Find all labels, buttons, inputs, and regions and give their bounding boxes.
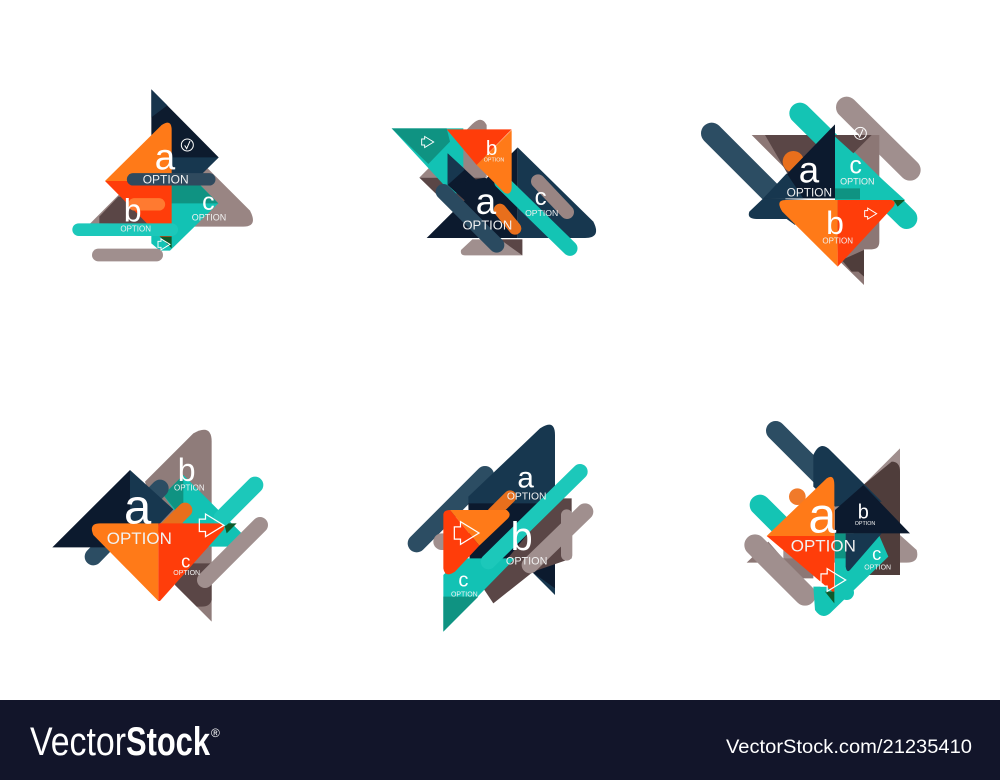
option a: OPTION: [143, 172, 189, 186]
option a: OPTION: [507, 491, 546, 502]
graphic 1: top left option diagram: [79, 89, 253, 255]
option c: OPTION: [192, 213, 226, 223]
option c: [173, 550, 200, 577]
option b: [822, 205, 853, 246]
option c: OPTION: [864, 564, 891, 571]
option a: a: [808, 488, 836, 544]
option c: OPTION: [525, 208, 558, 218]
option b: b: [826, 205, 844, 241]
option c: OPTION: [173, 570, 200, 577]
option b: [855, 501, 875, 527]
option b: b: [511, 515, 533, 559]
option a: [462, 181, 512, 232]
layered shapes 6: [747, 431, 917, 616]
option a: OPTION: [107, 529, 172, 548]
layered shapes 1: [79, 89, 253, 255]
option a: [507, 461, 546, 502]
option b: OPTION: [855, 521, 875, 527]
option c: c: [458, 570, 468, 592]
option b: b: [858, 501, 869, 523]
option c: c: [181, 550, 190, 571]
graphic 6: bottom right option diagram: [747, 431, 917, 616]
wordmark: VectorStock: [30, 720, 220, 764]
option b: OPTION: [506, 555, 547, 567]
footer bar: [0, 700, 1000, 780]
option c: c: [872, 543, 881, 564]
icon: check: [181, 139, 193, 151]
option c: [840, 151, 875, 186]
layered shapes 4: [52, 430, 260, 622]
option b: b: [124, 193, 142, 229]
wordmark: VectorStock: ®: [211, 726, 220, 740]
option c: c: [535, 184, 547, 211]
option b: OPTION: [822, 237, 853, 246]
layered shapes 5: [417, 425, 585, 632]
option c: [192, 188, 226, 223]
option b: b: [178, 452, 196, 488]
icon: arrow: [821, 569, 846, 591]
option b: OPTION: [174, 484, 205, 493]
option a: a: [799, 150, 820, 191]
option a: a: [476, 181, 497, 222]
option c: [451, 570, 478, 599]
option c: c: [202, 188, 215, 216]
option c: [864, 543, 891, 571]
option a: a: [155, 136, 176, 177]
icon: arrow: [158, 239, 170, 250]
graphic 4: bottom left option diagram: [52, 430, 260, 622]
graphic 3: top right option diagram: [712, 107, 910, 285]
option b: [506, 515, 547, 567]
wordmark: VectorStock: Stock: [126, 720, 211, 764]
option c: OPTION: [840, 176, 875, 186]
option b: [120, 193, 151, 234]
option a: a: [517, 461, 534, 494]
icon: arrow: [422, 136, 434, 148]
option c: [525, 184, 558, 218]
option a: OPTION: [791, 537, 856, 556]
option b: [484, 137, 504, 163]
layered shapes 3: [712, 107, 910, 285]
option a: OPTION: [787, 186, 832, 200]
icon: arrow: [199, 514, 224, 537]
image id url: VectorStock.com/21235410: [726, 737, 972, 758]
option a: OPTION: [462, 217, 512, 232]
icon: arrow: [454, 522, 479, 544]
wordmark: VectorStock: Vector: [30, 720, 126, 764]
graphic 5: bottom middle option diagram: [417, 425, 585, 632]
option c: OPTION: [451, 592, 478, 599]
option a: [143, 136, 189, 186]
icon: arrow: [865, 208, 877, 219]
option a: [107, 480, 172, 548]
graphic 2: top middle option diagram: [392, 120, 596, 255]
option c: c: [849, 151, 862, 179]
option a: [791, 488, 856, 556]
layered shapes 2: [392, 120, 596, 255]
icon: check: [854, 127, 866, 139]
option b: b: [486, 137, 497, 160]
option b: OPTION: [484, 157, 504, 163]
option b: [174, 452, 205, 493]
option b: OPTION: [120, 225, 151, 234]
option a: [787, 150, 832, 200]
option a: a: [124, 480, 152, 534]
